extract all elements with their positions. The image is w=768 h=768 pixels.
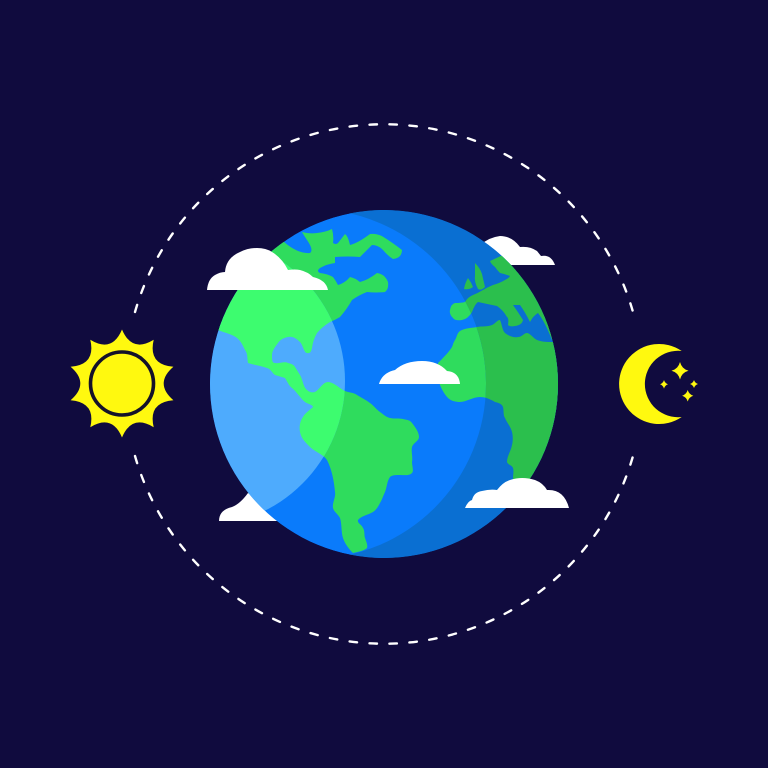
cloud: upper left, over globe bbox=[207, 248, 328, 290]
illustration: earth between sun and moon bbox=[70, 123, 698, 645]
large star bbox=[672, 362, 688, 380]
cloud: top right, behind globe bbox=[480, 236, 555, 265]
cloud: bottom left, behind globe bbox=[219, 493, 290, 521]
daylight zone on the left bbox=[210, 262, 345, 511]
ocean bbox=[210, 210, 558, 558]
cloud: bottom right, over globe bbox=[465, 478, 569, 508]
icon: moon and stars bbox=[619, 344, 698, 424]
small star right bbox=[690, 380, 698, 388]
crescent moon bbox=[619, 344, 682, 424]
icon: sun bbox=[71, 330, 173, 438]
sun rays bbox=[71, 330, 173, 438]
cloud: centre, over globe bbox=[379, 361, 460, 384]
continents bbox=[218, 229, 558, 553]
sun ring bbox=[90, 352, 154, 415]
night shadow zone on the right bbox=[350, 210, 558, 558]
dashed orbit path bbox=[135, 124, 633, 644]
globe bbox=[210, 210, 558, 558]
medium star bbox=[682, 390, 693, 402]
small star left bbox=[660, 380, 668, 389]
